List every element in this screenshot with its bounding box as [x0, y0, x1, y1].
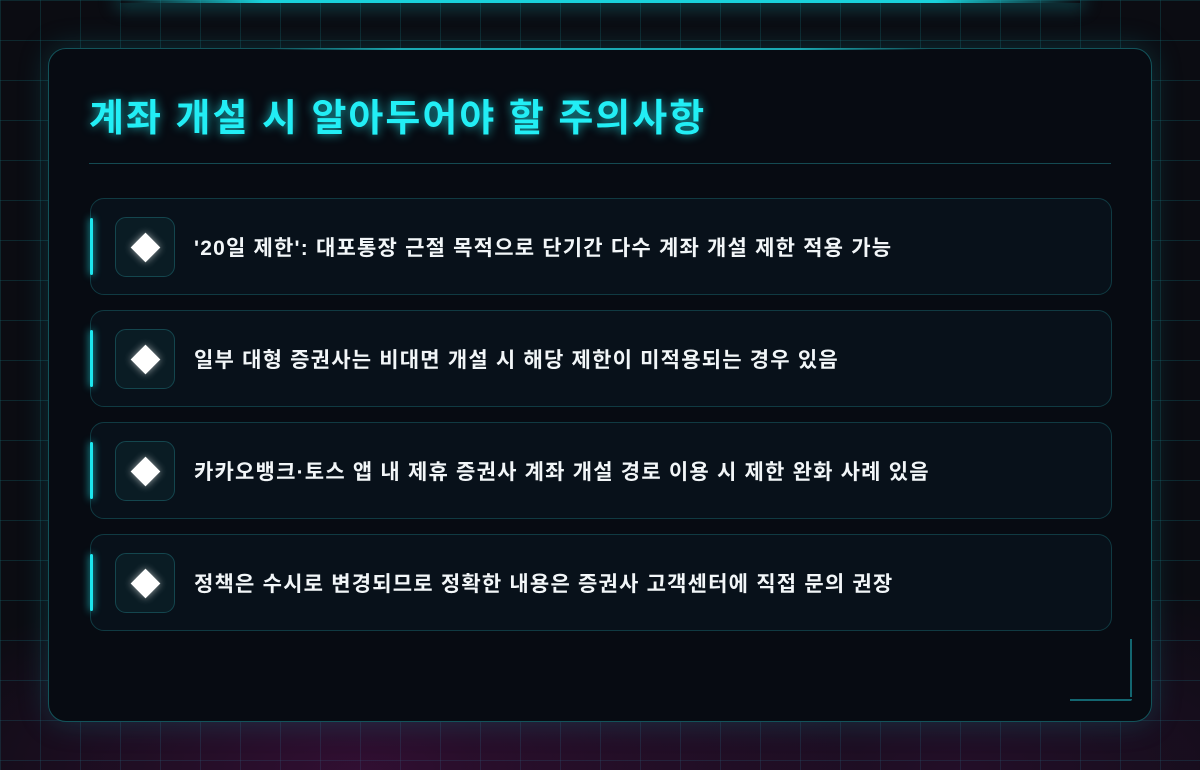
icon: diamond: [115, 441, 175, 501]
icon: diamond: [115, 553, 175, 613]
icon: diamond: [115, 217, 175, 277]
item 1: [90, 198, 1112, 295]
icon: diamond: [115, 329, 175, 389]
item 4: [90, 534, 1112, 631]
text 4: 정책은 수시로 변경되므로 정확한 내용은 증권사 고객센터에 직접 문의 권장: [194, 573, 893, 596]
text 1: '20일 제한': 대포통장 근절 목적으로 단기간 다수 계좌 개설 제한 적용 가능: [194, 237, 892, 260]
text 3: 카카오뱅크·토스 앱 내 제휴 증권사 계좌 개설 경로 이용 시 제한 완화 사례 있음: [194, 461, 930, 484]
item 3: [90, 422, 1112, 519]
text 2: 일부 대형 증권사는 비대면 개설 시 해당 제한이 미적용되는 경우 있음: [194, 349, 839, 372]
item 2: [90, 310, 1112, 407]
title: 계좌 개설 시 알아두어야 할 주의사항: [89, 98, 706, 140]
